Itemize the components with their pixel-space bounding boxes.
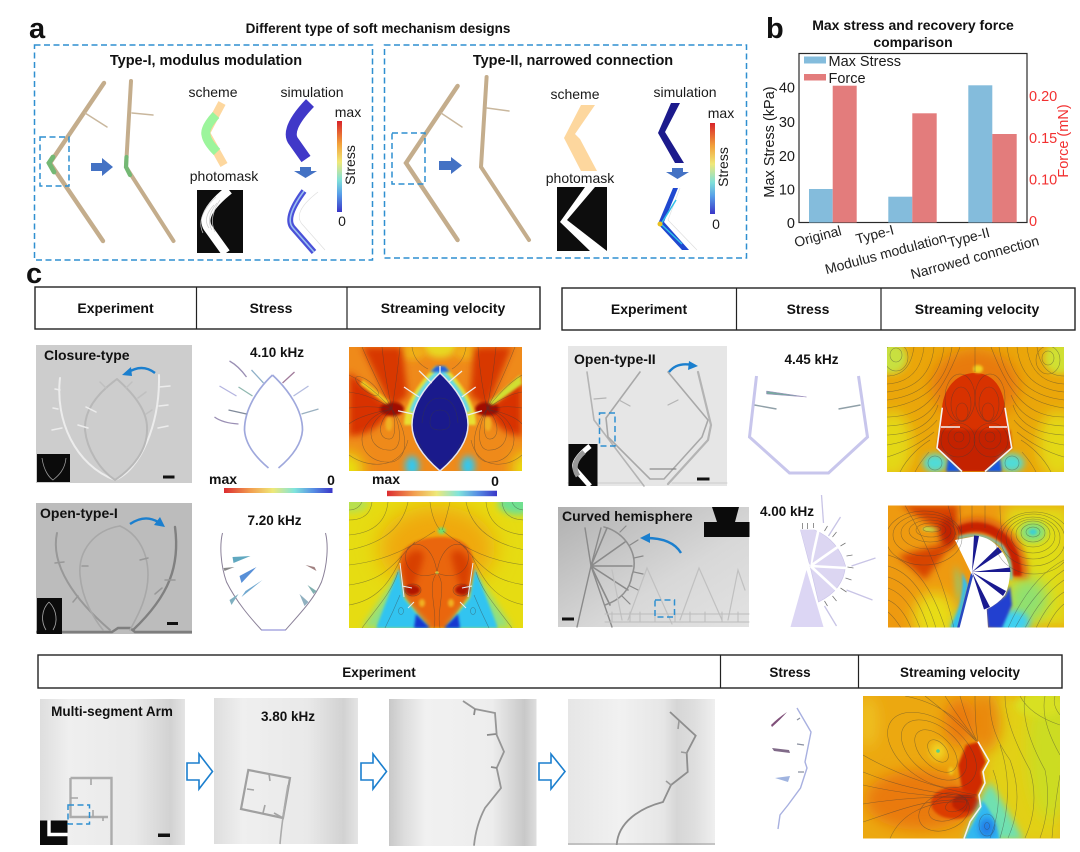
- scale bar: [163, 476, 174, 478]
- stress: arm: [771, 708, 811, 829]
- stress: open-type-I: [221, 513, 327, 630]
- left axis ticks: 20: [779, 149, 795, 165]
- scale bar: [167, 622, 178, 625]
- colour scale: stress: 0: [338, 213, 346, 229]
- inset mask: [37, 454, 70, 482]
- table header right: Experiment: [611, 301, 687, 317]
- left axis ticks: [779, 80, 795, 232]
- photo: multi-segment arm step 1: [40, 699, 185, 845]
- colour scale: stress: max: [335, 104, 361, 120]
- table header right: [562, 288, 1075, 330]
- panel label c: c: [26, 258, 42, 290]
- table header right: Stress: [787, 301, 830, 317]
- hinge edges: [400, 563, 473, 608]
- selection box: [40, 137, 69, 186]
- colour bar: velocity: [372, 471, 499, 496]
- colour bar: velocity: max: [372, 471, 400, 487]
- curved arrow: [669, 364, 692, 372]
- white wedges and navy struts: [955, 536, 1010, 628]
- hinge before actuation: [406, 86, 462, 240]
- scale bar: [158, 834, 170, 837]
- selection box: [600, 413, 615, 446]
- photo: curved hemisphere: [558, 507, 750, 627]
- scheme shape: [564, 105, 597, 171]
- photo: step 2: [214, 698, 358, 844]
- simulation upper: [658, 103, 684, 163]
- arrow 1: [187, 754, 212, 789]
- curved arrow: [646, 538, 681, 553]
- label: Open-type-I: [40, 505, 118, 521]
- right axis ticks: 0.20: [1029, 89, 1057, 105]
- streamlines: [884, 343, 1064, 472]
- curved arrow: [127, 368, 155, 373]
- inset mask: [568, 444, 598, 486]
- label simulation: simulation: [280, 84, 344, 100]
- left axis ticks: 30: [779, 115, 795, 131]
- arrow: [91, 158, 113, 176]
- stress: open-type-II: 4.45 kHz: [784, 352, 839, 367]
- panel: Type-I, modulus modulation: [34, 45, 372, 260]
- table header bottom: Streaming velocity: [900, 665, 1021, 680]
- category labels: Original: [792, 222, 843, 250]
- selection box: [655, 600, 674, 617]
- colour scale: stress: [335, 104, 361, 229]
- label simulation: simulation: [653, 84, 717, 100]
- simulation deformed: [290, 191, 325, 252]
- streamlines: [863, 696, 1060, 838]
- left axis ticks: 0: [787, 216, 795, 232]
- right axis ticks: 0.15: [1029, 131, 1057, 147]
- field: curved hemisphere streaming: [888, 506, 1064, 628]
- field: closure-type streaming: [349, 347, 522, 471]
- bars: [809, 85, 1017, 222]
- photo: step 3: [389, 699, 536, 846]
- label: 3.80 kHz: [261, 709, 315, 724]
- colour bar: stress: [209, 471, 335, 493]
- table header left: Stress: [250, 300, 293, 316]
- simulation upper: [291, 103, 310, 159]
- heading: Type-I: Type-I, modulus modulation: [110, 53, 302, 69]
- stress: curved hemisphere: 4.00 kHz: [760, 504, 814, 519]
- colour scale: stress: 0: [712, 216, 720, 232]
- inset mask: [40, 820, 68, 845]
- colour scale: stress: Stress: [715, 147, 731, 187]
- label scheme: scheme: [550, 86, 600, 102]
- legend: Force: [828, 71, 866, 87]
- scheme shape: [206, 103, 224, 165]
- colour scale: stress: max: [708, 105, 734, 121]
- scale bar: [697, 478, 710, 480]
- simulation deformed: [658, 188, 697, 250]
- category labels: Narrowed connection: [909, 232, 1041, 282]
- table header left: [35, 287, 540, 329]
- panel: Type-II, narrowed connection: [384, 45, 746, 258]
- label: Closure-type: [44, 347, 130, 363]
- category labels: Type-II: [946, 224, 991, 250]
- nozzle icon: [704, 507, 750, 537]
- wall: [964, 742, 989, 838]
- table header right: Streaming velocity: [915, 301, 1039, 317]
- photo: step 4: [568, 699, 715, 845]
- arrow: [439, 157, 462, 174]
- photomask: [197, 190, 243, 253]
- blue wake: [986, 586, 1012, 628]
- category labels: [792, 221, 1041, 282]
- photo: closure-type: [36, 345, 192, 483]
- field: open-type-I streaming: [349, 502, 523, 628]
- selection box: [392, 133, 425, 184]
- leaf body: [412, 373, 468, 471]
- legend: Max Stress: [828, 54, 901, 70]
- table header left: Streaming velocity: [381, 300, 505, 316]
- streamlines: [349, 347, 522, 465]
- label: Multi-segment Arm: [51, 704, 173, 719]
- scale bar: [562, 618, 574, 620]
- field: open-type-II streaming: [887, 347, 1064, 472]
- field: arm streaming: [863, 696, 1060, 838]
- selection box: [68, 805, 90, 824]
- label: Curved hemisphere: [562, 508, 693, 524]
- legend: [804, 54, 901, 87]
- colour bar: stress: max: [209, 471, 237, 487]
- colour bar: velocity: 0: [491, 473, 499, 489]
- stress: closure-type: [214, 345, 318, 468]
- curved arrow: [130, 518, 158, 524]
- leaf spines: [398, 366, 482, 415]
- chart title: Max stress and recovery force: [812, 17, 1014, 33]
- left axis title: Max Stress (kPa): [762, 86, 778, 198]
- category labels: Type-I: [854, 221, 896, 247]
- table header bottom: [38, 655, 1062, 688]
- right axis title: Force (mN): [1056, 104, 1072, 178]
- panel label b: b: [766, 13, 784, 45]
- left axis ticks: 40: [779, 80, 795, 96]
- down arrow: [294, 167, 317, 178]
- stress: open-type-I: 7.20 kHz: [247, 513, 302, 528]
- streamlines: [886, 506, 1072, 628]
- hinge after actuation: [481, 77, 529, 240]
- table header bottom: Experiment: [342, 665, 416, 680]
- left axis ticks: 10: [779, 182, 795, 198]
- hinge after actuation: [126, 81, 174, 241]
- label: Open-type-II: [574, 351, 656, 367]
- label photomask: photomask: [190, 168, 259, 184]
- bar chart: max stress and force: [762, 54, 1072, 282]
- hinge before actuation: [49, 83, 107, 241]
- colour scale: stress: [708, 105, 734, 232]
- stress: curved hemisphere: [760, 495, 876, 627]
- right axis ticks: 0.10: [1029, 172, 1057, 188]
- heading: Type-II: Type-II, narrowed connection: [473, 53, 673, 69]
- photo: open-type-II: [568, 346, 727, 486]
- right axis ticks: [1029, 89, 1057, 230]
- stress: closure-type: 4.10 kHz: [250, 345, 304, 360]
- photomask: [557, 187, 607, 251]
- chart title: comparison: [873, 34, 953, 50]
- right axis ticks: 0: [1029, 214, 1037, 230]
- colour scale: stress: Stress: [342, 145, 358, 185]
- panel label a: a: [29, 13, 46, 45]
- table header bottom: Stress: [769, 665, 811, 680]
- stress: open-type-II: [750, 352, 868, 473]
- down arrow: [666, 168, 689, 179]
- category labels: Modulus modulation: [823, 229, 948, 277]
- colour bar: stress: 0: [327, 472, 335, 488]
- label photomask: photomask: [546, 170, 615, 186]
- title: soft mechanism designs: Different type of soft mechanism designs: [246, 21, 510, 36]
- walls: [937, 408, 1012, 472]
- arrow 2: [361, 754, 386, 789]
- arrow 3: [539, 754, 565, 789]
- photo: open-type-I: [36, 503, 192, 634]
- inset mask: [37, 598, 62, 634]
- label scheme: scheme: [188, 84, 238, 100]
- table header left: Experiment: [77, 300, 154, 316]
- streamlines: [349, 502, 525, 628]
